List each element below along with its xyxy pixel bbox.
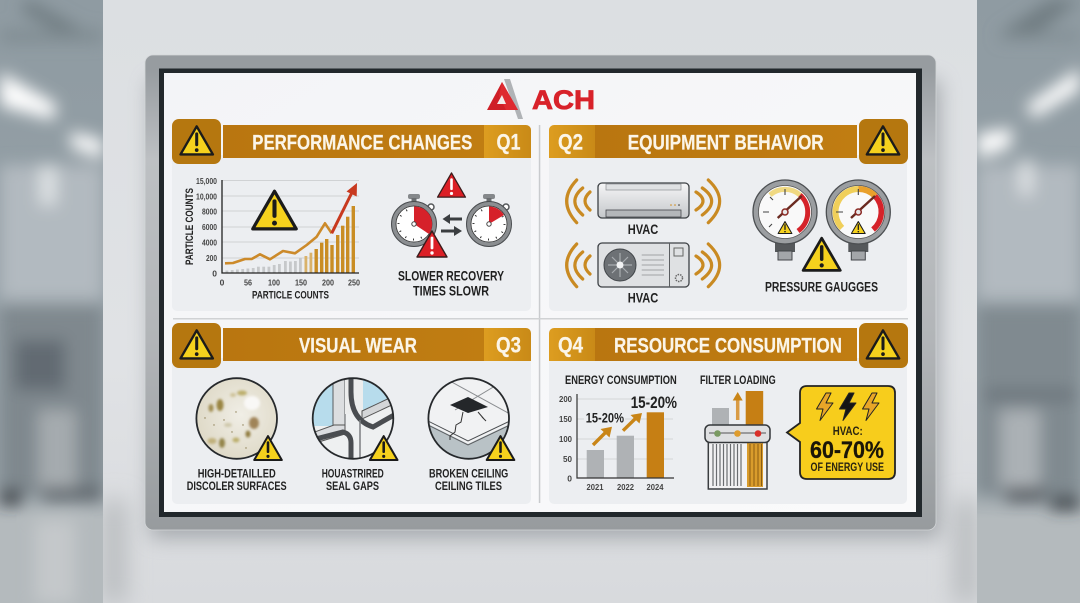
chart: particle counts: 15,000 <box>196 176 217 186</box>
dividers <box>173 125 908 503</box>
chart: energy consumption: 150 <box>559 414 572 424</box>
chart: energy consumption <box>559 375 677 492</box>
heading: equipment behavior <box>549 125 857 158</box>
icon: outdoor HVAC unit <box>598 243 689 287</box>
chart: energy consumption: 0 <box>567 474 572 484</box>
icon: filter loading: FILTER LOADING <box>700 375 776 387</box>
icon: right stopwatch <box>466 194 512 246</box>
chart: particle counts: 0 <box>220 278 225 288</box>
panel: Q3 visual wear <box>172 323 531 504</box>
chart: energy consumption: 100 <box>559 434 572 444</box>
chart: particle counts: 100 <box>268 278 280 288</box>
icon: warning triangle <box>803 238 840 270</box>
heading: visual wear <box>223 328 531 361</box>
icon: indoor HVAC unit <box>598 183 689 218</box>
label: seal gaps: HOUASTRIRED <box>322 468 384 480</box>
logo: ACH: ACH <box>532 85 595 115</box>
heading: resource consumption <box>549 328 857 361</box>
label: broken ceiling tiles <box>429 468 508 493</box>
chart: particle counts: 8000 <box>202 206 217 216</box>
icon: warning tile Q3 <box>172 323 221 368</box>
label: broken ceiling tiles: CEILING TILES <box>435 481 502 493</box>
heading: resource consumption: Q4 <box>558 332 584 358</box>
label: HVAC: HVAC <box>628 222 658 237</box>
monitor frame <box>145 55 940 538</box>
label: discolored surfaces: HIGH-DETAILLED <box>198 468 276 480</box>
chart: particle counts: 200 <box>322 278 334 288</box>
label: HVAC: HVAC <box>628 291 658 306</box>
label: seal gaps <box>322 468 384 493</box>
chart: energy consumption: 2021 <box>586 482 604 492</box>
icon: broken ceiling tile <box>428 378 514 460</box>
logo: ACH <box>487 79 595 119</box>
chart: particle counts: 150 <box>295 278 307 288</box>
label: discolored surfaces <box>187 468 287 493</box>
heading: performance changes: Q1 <box>496 130 520 154</box>
chart: particle counts: 56 <box>244 278 252 288</box>
icon: discolored surface <box>196 378 282 460</box>
sound waves bottom <box>567 244 720 287</box>
chart: particle counts <box>184 176 360 302</box>
label: slower recovery <box>398 268 504 299</box>
chart: energy consumption: 2022 <box>617 482 634 492</box>
heading: equipment behavior: Q2 <box>558 130 583 154</box>
chart: energy consumption: 2024 <box>646 482 664 492</box>
heading: resource consumption: RESOURCE CONSUMPTION <box>614 334 842 358</box>
chart: particle counts: PARTICLE COUNTS <box>252 290 329 302</box>
callout: HVAC 60-70% of energy use: OF ENERGY USE <box>810 462 884 474</box>
icon: stopwatches <box>392 173 512 257</box>
panel: Q4 resource consumption <box>549 323 908 504</box>
chart: energy consumption: 200 <box>559 394 572 404</box>
icon: left stopwatch <box>392 194 436 246</box>
chart: particle counts: 200 <box>206 253 217 263</box>
icon: seal gaps <box>312 378 398 460</box>
chart: energy consumption: 15-20% <box>586 411 624 426</box>
label: slower recovery: SLOWER RECOVERY <box>398 268 504 284</box>
chart: particle counts: 0 <box>212 268 217 278</box>
icon: warning tile Q2 <box>859 119 908 164</box>
panel: Q1 performance changes <box>172 119 531 311</box>
icon: warning tile Q4 <box>859 323 908 368</box>
callout: HVAC 60-70% of energy use: 60-70% <box>810 437 884 464</box>
icon: pressure gauge left <box>753 180 817 260</box>
chart: energy consumption: 15-20% <box>631 394 677 412</box>
icon: filter loading <box>700 375 776 489</box>
heading: equipment behavior: EQUIPMENT BEHAVIOR <box>628 132 824 154</box>
chart: particle counts: 4000 <box>202 238 217 248</box>
label: seal gaps: SEAL GAPS <box>326 481 379 493</box>
chart: particle counts: PARTICLE COUNTS <box>184 188 196 265</box>
heading: performance changes: PERFORMANCE CHANGES <box>252 132 472 154</box>
heading: performance changes <box>223 125 531 158</box>
label: slower recovery: TIMES SLOWR <box>413 283 489 299</box>
chart: energy consumption: 50 <box>563 454 572 464</box>
icon: pressure gauge right <box>826 180 890 260</box>
chart: particle counts: 250 <box>348 278 360 288</box>
label: pressure gauges: PRESSURE GAUGGES <box>765 280 878 295</box>
sound waves top <box>567 180 720 223</box>
chart: energy consumption: ENERGY CONSUMPTION <box>565 375 677 387</box>
label: broken ceiling tiles: BROKEN CEILING <box>429 468 508 480</box>
callout: HVAC 60-70% of energy use <box>787 386 895 479</box>
heading: visual wear: VISUAL WEAR <box>299 334 417 358</box>
chart: particle counts: 6000 <box>202 222 217 232</box>
chart: particle counts: 10,000 <box>196 192 217 202</box>
label: discolored surfaces: DISCOLER SURFACES <box>187 481 287 493</box>
heading: visual wear: Q3 <box>496 332 521 358</box>
panel: Q2 equipment behavior <box>549 119 908 311</box>
callout: HVAC 60-70% of energy use: HVAC: <box>833 426 863 438</box>
icon: warning tile Q1 <box>172 119 221 164</box>
